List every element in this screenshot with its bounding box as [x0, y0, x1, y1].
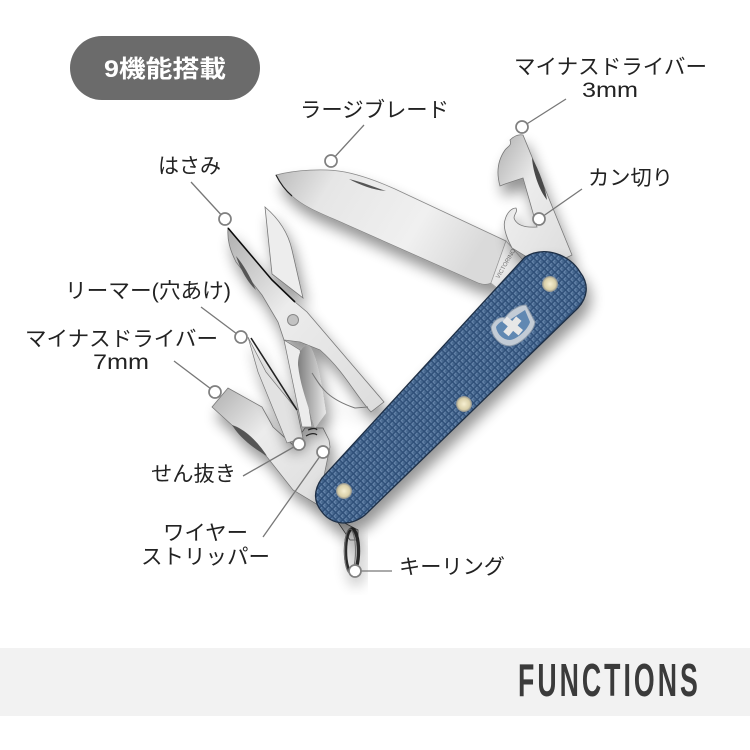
footer band: functions — [0, 648, 750, 716]
rivet: bottom — [336, 483, 352, 499]
title badge: 9 functions: 9機能搭載 — [104, 56, 226, 83]
label: screwdriver 3mm — [514, 56, 707, 133]
tool: screwdriver and wire stripper blade — [212, 388, 330, 505]
label: wire stripper: ワイヤー — [163, 522, 248, 545]
rivet: top — [542, 276, 558, 292]
label: can opener — [533, 167, 673, 225]
tool: large blade: VICTORINOX — [496, 245, 519, 280]
label: key ring: キーリング — [399, 556, 505, 579]
label: bottle opener: せん抜き — [151, 463, 236, 486]
label: key ring — [349, 556, 505, 579]
handle: alox scales — [316, 252, 586, 523]
label: wire stripper: ストリッパー — [141, 546, 270, 569]
label: screwdriver 7mm: マイナスドライバー — [25, 328, 218, 351]
label: large blade: ラージブレード — [300, 99, 449, 122]
tool: reamer — [248, 337, 303, 443]
footer band: functions: FUNCTIONS — [518, 654, 698, 706]
label: wire stripper — [141, 446, 329, 569]
tool: can opener and small screwdriver — [498, 135, 572, 268]
label: scissors: はさみ — [158, 155, 221, 178]
label: screwdriver 3mm: マイナスドライバー — [514, 56, 707, 79]
tool: large blade — [276, 170, 523, 288]
label: scissors — [158, 155, 231, 225]
label: reamer: リーマー(穴あけ) — [65, 280, 231, 303]
label: large blade — [300, 99, 449, 167]
tool: scissors — [228, 207, 384, 428]
label: screwdriver 7mm: 7mm — [93, 351, 149, 374]
label: screwdriver 3mm: 3mm — [582, 79, 638, 102]
title badge: 9 functions — [70, 36, 260, 100]
rivet: middle — [456, 396, 472, 412]
swiss army knife illustration — [212, 135, 586, 573]
logo: cross and shield — [491, 305, 535, 346]
label: reamer — [65, 280, 247, 343]
label: can opener: カン切り — [588, 167, 673, 190]
label: bottle opener — [151, 438, 305, 486]
tool: key ring — [335, 518, 358, 573]
label: screwdriver 7mm — [25, 328, 221, 398]
